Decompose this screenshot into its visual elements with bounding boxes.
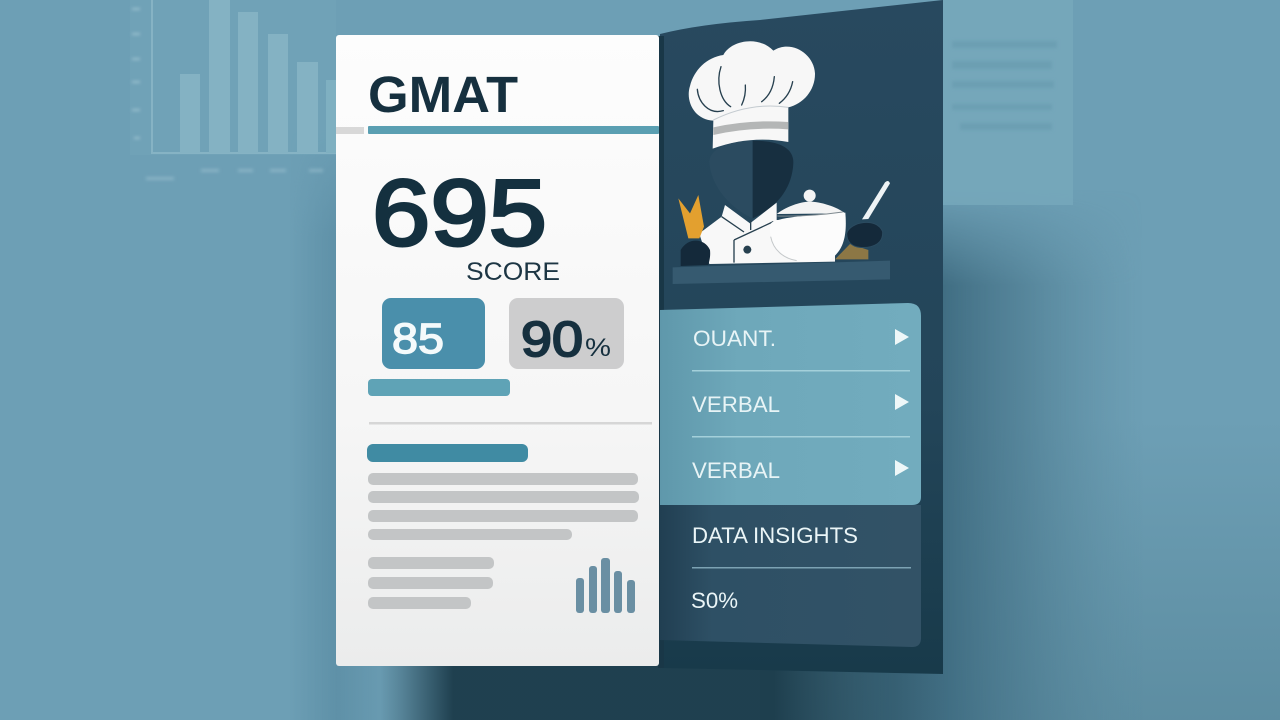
title: GMAT bbox=[368, 66, 518, 123]
icon: spoon bbox=[862, 181, 890, 219]
icon: white lidded pot bbox=[770, 190, 846, 261]
menu item: Data Insights: DATA INSIGHTS bbox=[692, 523, 858, 548]
total score: 695 bbox=[372, 160, 547, 265]
progress bar bbox=[368, 379, 510, 396]
menu item: Verbal: VERBAL bbox=[692, 392, 780, 417]
icon: chef jacket bbox=[699, 203, 835, 264]
stat: 90 percent: 90 bbox=[521, 313, 583, 367]
icon: chef hat bbox=[689, 41, 815, 149]
menu item: percentage: S0% bbox=[691, 588, 738, 613]
title rule bbox=[336, 126, 659, 134]
menu item: Verbal bbox=[692, 392, 909, 417]
score label: SCORE bbox=[466, 258, 560, 286]
icon: dark pot bbox=[847, 222, 883, 247]
text placeholder lines bbox=[368, 473, 639, 609]
panel: teal menu bbox=[660, 303, 921, 505]
icon: dark bowl left bbox=[681, 241, 710, 266]
faded background document bbox=[943, 0, 1073, 205]
mini bar chart bbox=[576, 558, 635, 613]
faded background bar chart bbox=[130, 0, 336, 180]
panel: dark back cover bbox=[658, 0, 943, 674]
icon: yellow wheat bbox=[678, 195, 704, 238]
icon: small brown board bbox=[835, 244, 868, 259]
menu item: Verbal repeated bbox=[692, 458, 909, 483]
section heading bar bbox=[367, 444, 528, 462]
menu item: Quant bbox=[693, 326, 909, 351]
chef illustration bbox=[673, 41, 890, 284]
background bbox=[313, 188, 1280, 720]
menu item: Quant: OUANT. bbox=[693, 326, 776, 351]
stat: 90 percent: % bbox=[585, 334, 611, 362]
shelf bbox=[673, 261, 890, 284]
icon: faceless chef head bbox=[709, 141, 793, 218]
stat: 85: 85 bbox=[392, 315, 444, 363]
panel: white score page bbox=[336, 35, 659, 666]
stat: 90 percent bbox=[509, 298, 624, 369]
stat: 85 bbox=[382, 298, 485, 369]
panel: dark menu bbox=[660, 505, 921, 647]
menu item: Verbal repeated: VERBAL bbox=[692, 458, 780, 483]
